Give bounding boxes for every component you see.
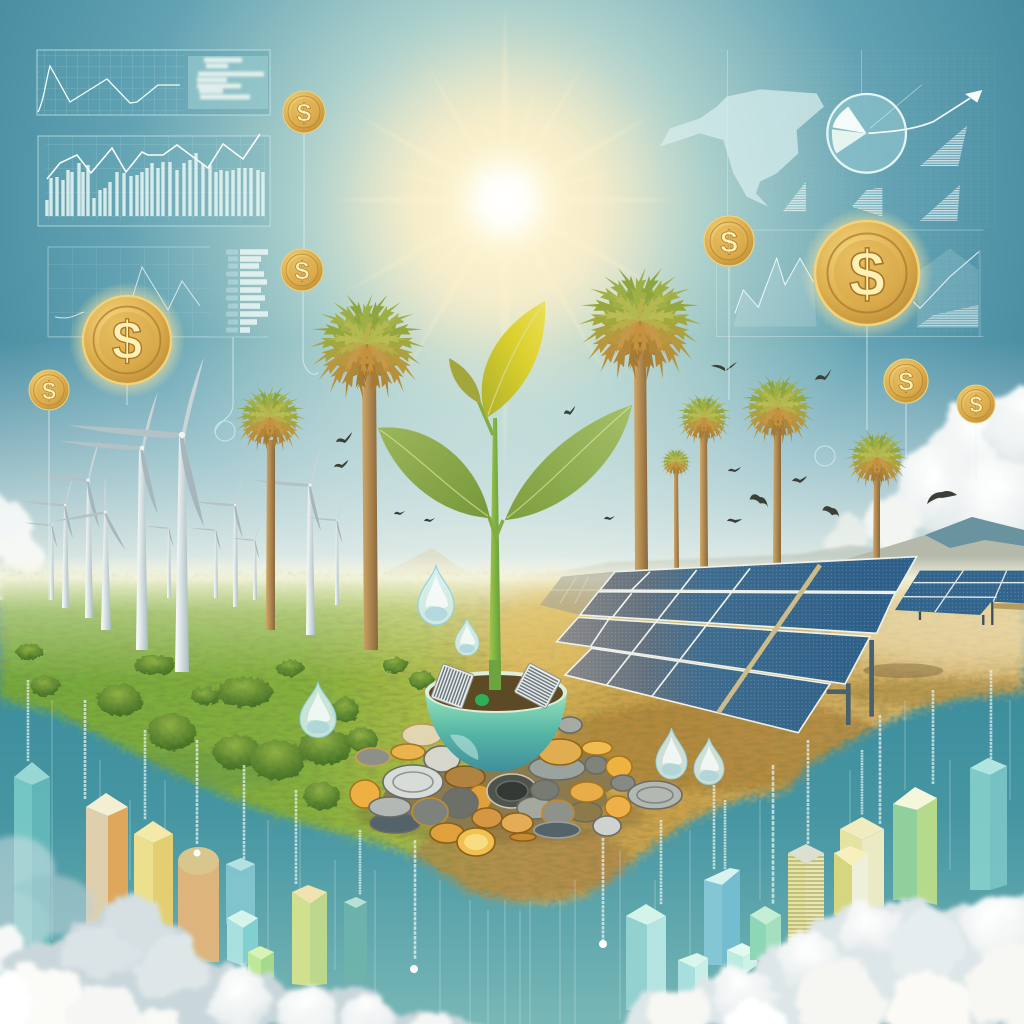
sky background	[0, 0, 1024, 700]
clouds: left horizon	[0, 495, 45, 575]
blue bar	[704, 868, 740, 965]
distant mountains	[380, 517, 1024, 610]
aqua short bar	[227, 910, 258, 966]
palm 6	[660, 447, 692, 568]
3D bars: right group	[626, 758, 1007, 1010]
aqua bar	[626, 904, 666, 1010]
yellow back bar	[840, 817, 884, 925]
clouds: bottom left	[0, 836, 490, 1024]
land: green meadow to dry field	[0, 556, 1024, 920]
solar panels	[540, 557, 1024, 733]
middle coins	[350, 765, 682, 838]
coin pile	[350, 717, 682, 856]
stem base	[489, 660, 501, 690]
palm 7	[845, 428, 909, 558]
water backdrop	[0, 640, 1024, 1024]
side branches	[478, 400, 503, 540]
growth arrow	[868, 85, 982, 133]
panel: right background dashboard grid	[660, 50, 997, 337]
coin threads	[49, 133, 976, 600]
3D bars: left group	[14, 762, 367, 986]
small left leaf	[449, 358, 481, 404]
dry grass band	[550, 699, 890, 791]
striped triangles	[783, 125, 967, 221]
lower area chart	[733, 248, 979, 327]
panel: top-left line chart with bars	[37, 50, 270, 115]
clouds: bottom right	[619, 885, 1024, 1024]
main array	[557, 557, 917, 733]
dark teal bar	[344, 897, 367, 982]
right silver card	[514, 663, 561, 709]
teal tall bar	[970, 758, 1007, 890]
palm trees	[234, 263, 909, 650]
palm 3	[234, 384, 306, 630]
striped tower	[788, 844, 824, 945]
front coins	[412, 798, 536, 856]
bowl reflection	[450, 735, 478, 760]
birds	[334, 362, 957, 523]
back-left faded array	[540, 572, 615, 615]
palm 1	[309, 290, 425, 650]
floating gold coins	[29, 91, 995, 423]
soil	[429, 675, 563, 711]
pie chart	[827, 94, 906, 173]
back-right array	[895, 571, 1024, 625]
rain streaks and thin lines	[28, 670, 1010, 1024]
light blue bar	[226, 858, 255, 924]
panel: bar and line chart	[38, 134, 270, 226]
yellow bar	[134, 821, 173, 930]
sun with rays	[330, 6, 681, 470]
left big leaf	[378, 427, 490, 518]
yellow front bar	[834, 846, 868, 915]
green tall bar	[893, 787, 937, 905]
green nugget	[475, 694, 489, 706]
panel: faded chart with horizontal bars	[48, 247, 268, 337]
palm 5	[740, 372, 816, 565]
bushes	[16, 644, 435, 810]
top leaf	[482, 301, 545, 418]
support posts	[827, 640, 943, 725]
water droplets	[300, 565, 724, 784]
teal bar	[14, 762, 50, 950]
lime bar	[292, 885, 327, 986]
map: North America	[660, 89, 824, 207]
plant bowl with soil	[425, 660, 567, 772]
tan bar	[86, 793, 128, 925]
palm 2	[578, 263, 702, 571]
rim	[425, 671, 567, 713]
stem	[489, 418, 501, 680]
small aqua cubes	[678, 943, 757, 996]
left silver card	[431, 664, 474, 709]
leaf midribs	[380, 303, 630, 518]
green bar	[750, 906, 781, 960]
wind turbines	[24, 357, 342, 672]
sprout plant	[378, 301, 632, 680]
horizon haze	[0, 340, 1024, 600]
green cube	[248, 946, 274, 978]
back coins	[356, 717, 635, 791]
bowl body	[425, 690, 567, 772]
cylinder bar	[178, 847, 219, 962]
clouds: right horizon	[830, 385, 1024, 555]
right big leaf	[505, 405, 632, 520]
palm 4	[676, 392, 732, 568]
